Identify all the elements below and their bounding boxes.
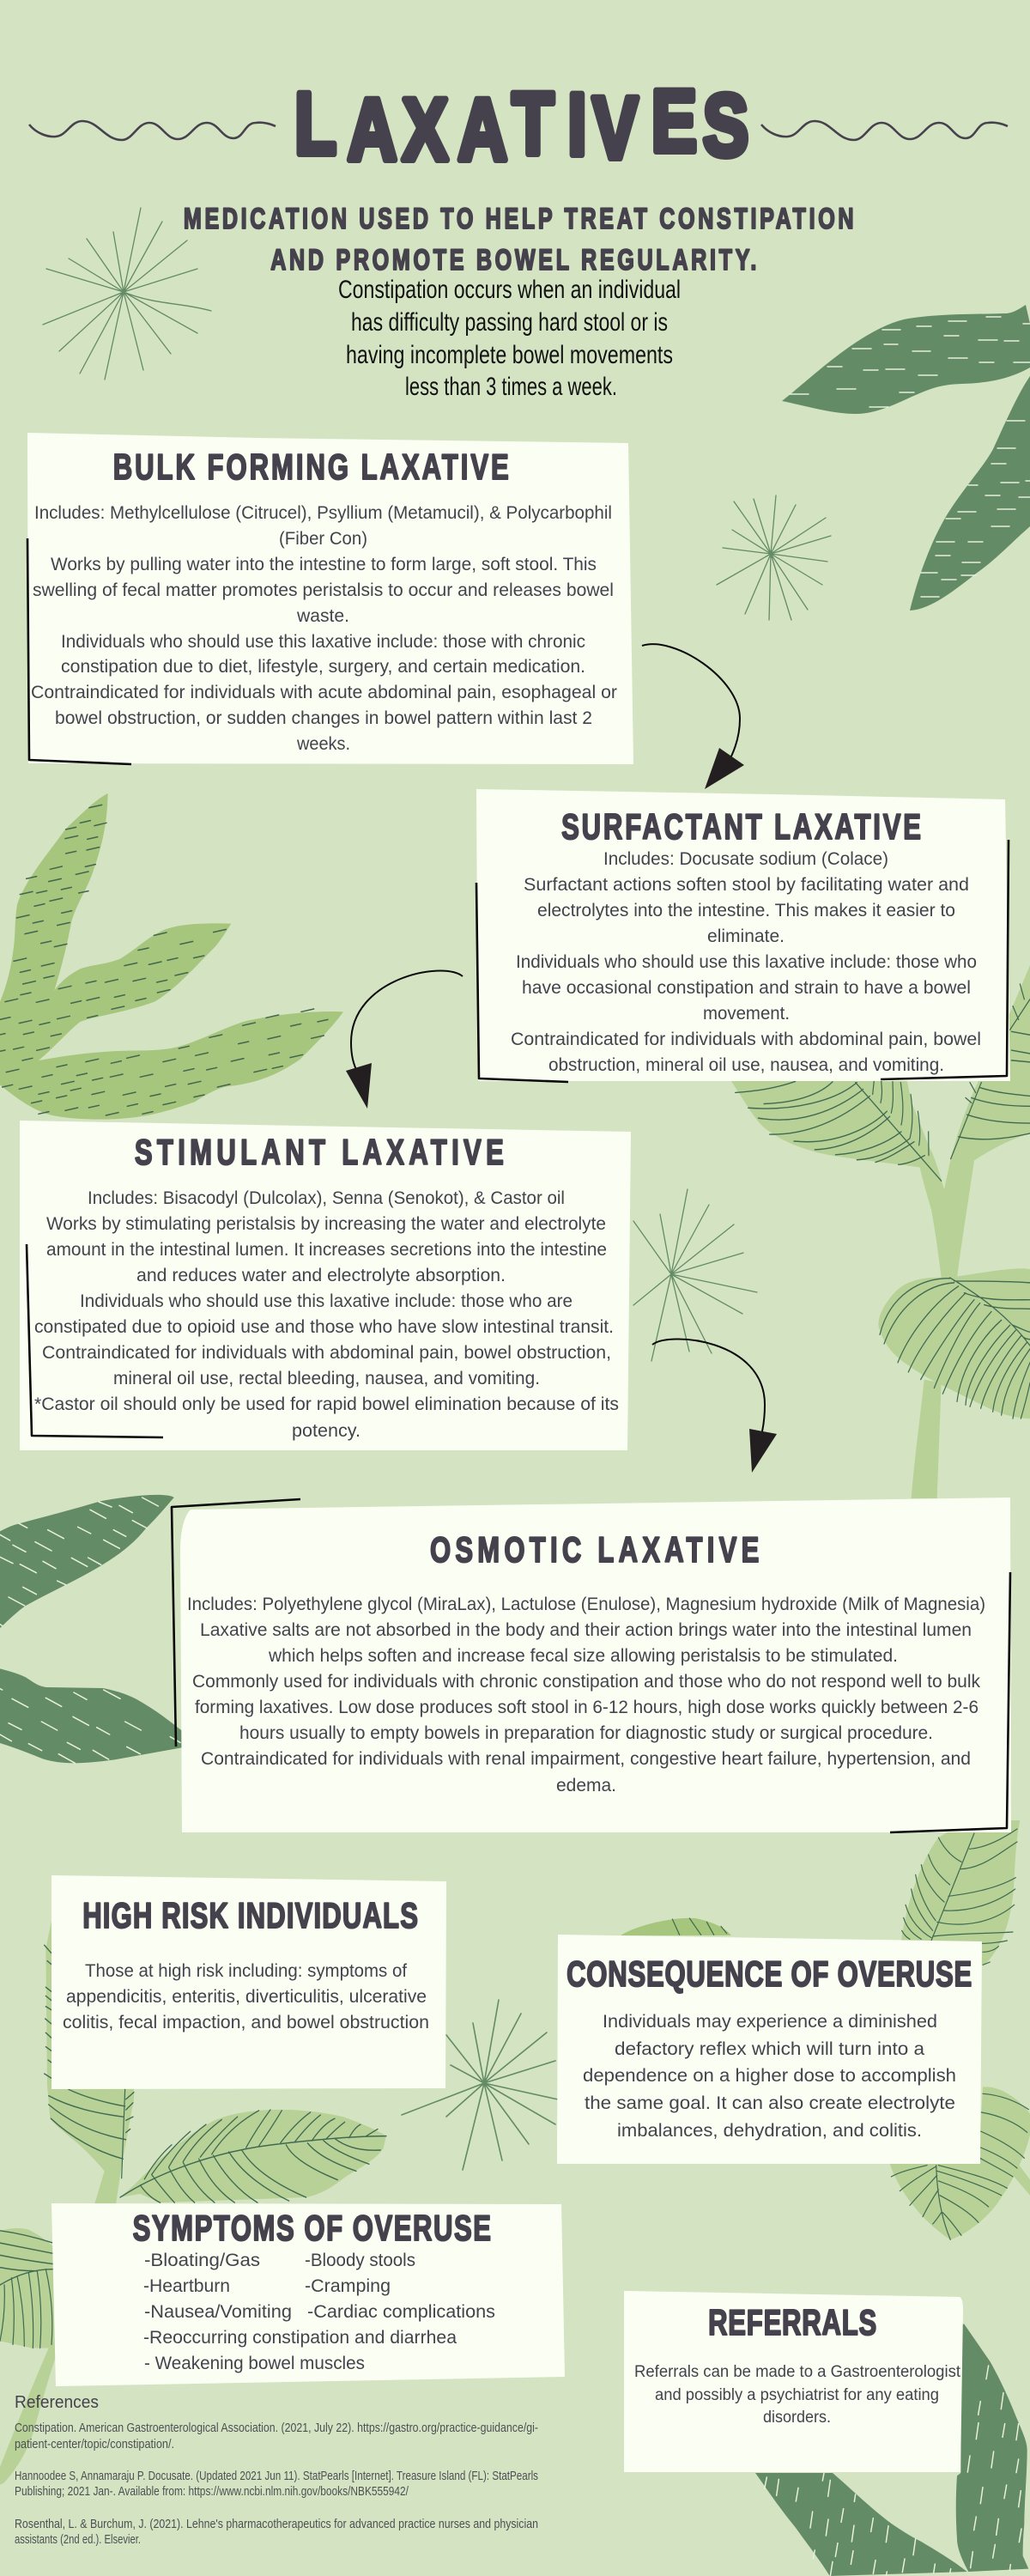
arrow: stimulant to osmotic: [652, 1339, 777, 1473]
body text: movement.: [703, 1004, 790, 1024]
body text: Individuals who should use this laxative include: those with chronic: [61, 632, 585, 652]
symptom list: -Heartburn: [143, 2276, 230, 2296]
panel: referrals: [624, 2291, 963, 2472]
heading: CONSEQUENCE OF OVERUSE: [566, 1953, 972, 1994]
body text: Works by stimulating peristalsis by increasing the water and electrolyte: [46, 1214, 606, 1234]
body text: have occasional constipation and strain to have a bowel: [522, 978, 971, 998]
panel: high risk individuals: [52, 1875, 446, 2089]
plant: lower right veined leaves: [621, 1820, 1030, 2239]
body text: edema.: [556, 1776, 616, 1795]
reference entries: assistants (2nd ed.). Elsevier.: [15, 2532, 141, 2547]
reference entries: patient-center/topic/constipation/.: [15, 2437, 174, 2451]
intro text: [338, 276, 681, 401]
body text: mineral oil use, rectal bleeding, nausea, and vomiting.: [113, 1369, 540, 1388]
body text: electrolytes into the intestine. This makes it easier to: [537, 901, 955, 920]
intro text: having incomplete bowel movements: [346, 341, 673, 369]
decorative burst: top left: [43, 208, 211, 380]
body text: Contraindicated for individuals with renal impairment, congestive heart failure, hypertension, and: [201, 1749, 971, 1769]
body text: disorders.: [763, 2409, 831, 2427]
body text: Individuals who should use this laxative include: those who are: [80, 1291, 573, 1311]
body text: constipation due to diet, lifestyle, surgery, and certain medication.: [61, 657, 585, 677]
subtitle: [184, 203, 854, 276]
panel: consequence of overuse: [557, 1935, 982, 2164]
body text: Contraindicated for individuals with abdominal pain, bowel: [511, 1030, 981, 1049]
body text: [583, 2012, 956, 2141]
body text: hours usually to empty bowels in preparation for diagnostic study or surgical procedure.: [239, 1723, 933, 1743]
symptom list: -Bloody stools: [305, 2251, 415, 2270]
body text: [63, 1961, 429, 2032]
body text: and reduces water and electrolyte absorption.: [136, 1266, 506, 1285]
body text: Surfactant actions soften stool by facilitating water and: [524, 875, 969, 895]
leaves: dark green bottom right pair: [755, 2324, 1028, 2576]
body text: (Fiber Con): [279, 529, 367, 549]
panel: osmotic laxative: [172, 1498, 1011, 1832]
leaf: light green left branch: [0, 793, 343, 1120]
body text: Includes: Bisacodyl (Dulcolax), Senna (Senokot), & Castor oil: [88, 1188, 565, 1208]
body text: Laxative salts are not absorbed in the body and their action brings water into the intestinal lumen: [200, 1620, 972, 1640]
body text: swelling of fecal matter promotes peristalsis to occur and releases bowel: [33, 580, 614, 600]
body text: [31, 503, 617, 754]
body text: Referrals can be made to a Gastroenterologist: [634, 2363, 961, 2381]
decorative burst: upper right: [717, 495, 831, 620]
symptom list: -Nausea/Vomiting: [144, 2302, 292, 2322]
subtitle: AND PROMOTE BOWEL REGULARITY.: [270, 244, 756, 276]
symptom list: -Reoccurring constipation and diarrhea: [143, 2328, 457, 2348]
wavy line left: [29, 121, 276, 140]
subtitle: MEDICATION USED TO HELP TREAT CONSTIPATION: [184, 203, 854, 235]
symptom list: - Weakening bowel muscles: [144, 2354, 365, 2373]
references heading: References: [15, 2393, 99, 2412]
body text: amount in the intestinal lumen. It increases secretions into the intestine: [46, 1240, 607, 1260]
body text: dependence on a higher dose to accomplish: [583, 2066, 956, 2086]
panel: surfactant laxative: [476, 789, 1010, 1082]
body text: Individuals may experience a diminished: [603, 2012, 937, 2032]
body text: Includes: Polyethylene glycol (MiraLax), Lactulose (Enulose), Magnesium hydroxide (Milk of Magnesia): [187, 1595, 985, 1614]
body text: Includes: Methylcellulose (Citrucel), Psyllium (Metamucil), & Polycarbophil: [34, 503, 612, 523]
arrow: surfactant to stimulant: [346, 971, 463, 1109]
body text: colitis, fecal impaction, and bowel obstruction: [63, 2013, 429, 2032]
symptom list: -Cardiac complications: [307, 2302, 495, 2322]
intro text: less than 3 times a week.: [405, 373, 617, 401]
intro text: Constipation occurs when an individual: [338, 276, 681, 304]
intro text: has difficulty passing hard stool or is: [351, 308, 668, 337]
symptom list: [143, 2251, 495, 2373]
body text: [187, 1595, 985, 1795]
leaves: dark green left pair: [0, 1495, 183, 1763]
references: [15, 2393, 538, 2547]
body text: defactory reflex which will turn into a: [615, 2039, 924, 2059]
heading: HIGH RISK INDIVIDUALS: [82, 1895, 418, 1935]
heading: STIMULANT LAXATIVE: [135, 1132, 504, 1172]
body text: forming laxatives. Low dose produces soft stool in 6-12 hours, high dose works quickly between 2-6: [195, 1698, 978, 1717]
symptom list: -Bloating/Gas: [144, 2251, 260, 2270]
heading: OSMOTIC LAXATIVE: [430, 1529, 759, 1570]
body text: and possibly a psychiatrist for any eating: [655, 2386, 939, 2404]
panel: stimulant laxative: [20, 1121, 631, 1450]
title with wavy lines: [29, 73, 1008, 179]
body text: Individuals who should use this laxative include: those who: [516, 952, 977, 972]
body text: Commonly used for individuals with chronic constipation and those who do not respond well to bulk: [192, 1672, 980, 1692]
body text: [511, 849, 981, 1075]
plant: right stem with veined leaves: [704, 965, 1030, 1498]
body text: *Castor oil should only be used for rapid bowel elimination because of its: [34, 1394, 619, 1414]
body text: obstruction, mineral oil use, nausea, and vomiting.: [548, 1055, 944, 1075]
wavy line right: [761, 121, 1008, 140]
body text: waste.: [296, 606, 349, 626]
body text: bowel obstruction, or sudden changes in bowel pattern within last 2: [55, 708, 592, 728]
decorative burst: lower middle: [402, 2000, 558, 2170]
plant: lower left stem with veined leaves: [0, 1921, 386, 2485]
panel: bulk forming laxative: [27, 433, 633, 764]
arrow: bulk to surfactant: [642, 644, 744, 789]
body text: the same goal. It can also create electrolyte: [585, 2093, 955, 2113]
body text: which helps soften and increase fecal size allowing peristalsis to be stimulated.: [268, 1646, 898, 1666]
body text: potency.: [292, 1421, 360, 1441]
reference entries: Rosenthal, L. & Burchum, J. (2021). Lehne's pharmacotherapeutics for advanced practice nurses and physician: [15, 2517, 538, 2531]
reference entries: Publishing; 2021 Jan-. Available from: https://www.ncbi.nlm.nih.gov/books/NBK555942/: [15, 2484, 409, 2499]
heading: SURFACTANT LAXATIVE: [561, 806, 921, 847]
body text: eliminate.: [707, 927, 785, 946]
reference entries: Constipation. American Gastroenterological Association. (2021, July 22). https://gastro.org/practice-guidance/gi-: [15, 2421, 538, 2435]
body text: Contraindicated for individuals with abdominal pain, bowel obstruction,: [42, 1343, 611, 1363]
body text: Contraindicated for individuals with acute abdominal pain, esophageal or: [31, 683, 617, 702]
heading: BULK FORMING LAXATIVE: [113, 447, 509, 487]
reference entries: Hannoodee S, Annamaraju P. Docusate. (Updated 2021 Jun 11). StatPearls [Internet]. Treasure Island (FL): StatPearls: [15, 2469, 538, 2483]
body text: Works by pulling water into the intestine to form large, soft stool. This: [51, 555, 597, 574]
body text: constipated due to opioid use and those who have slow intestinal transit.: [34, 1317, 614, 1337]
body text: [34, 1188, 619, 1441]
body text: imbalances, dehydration, and colitis.: [617, 2121, 922, 2141]
body text: Includes: Docusate sodium (Colace): [603, 849, 888, 869]
body text: weeks.: [296, 734, 350, 754]
leaf: dark green top right pair: [782, 305, 1030, 611]
body text: Those at high risk including: symptoms of: [85, 1961, 407, 1981]
body text: appendicitis, enteritis, diverticulitis, ulcerative: [66, 1987, 427, 2007]
title text: LAXATIVES: [294, 73, 748, 179]
reference entries: [15, 2421, 538, 2547]
decorative burst: middle: [633, 1189, 757, 1361]
heading: REFERRALS: [708, 2302, 876, 2342]
body text: [634, 2363, 961, 2427]
symptom list: -Cramping: [305, 2276, 391, 2296]
panel: symptoms of overuse: [52, 2203, 565, 2386]
heading: SYMPTOMS OF OVERUSE: [133, 2208, 491, 2248]
